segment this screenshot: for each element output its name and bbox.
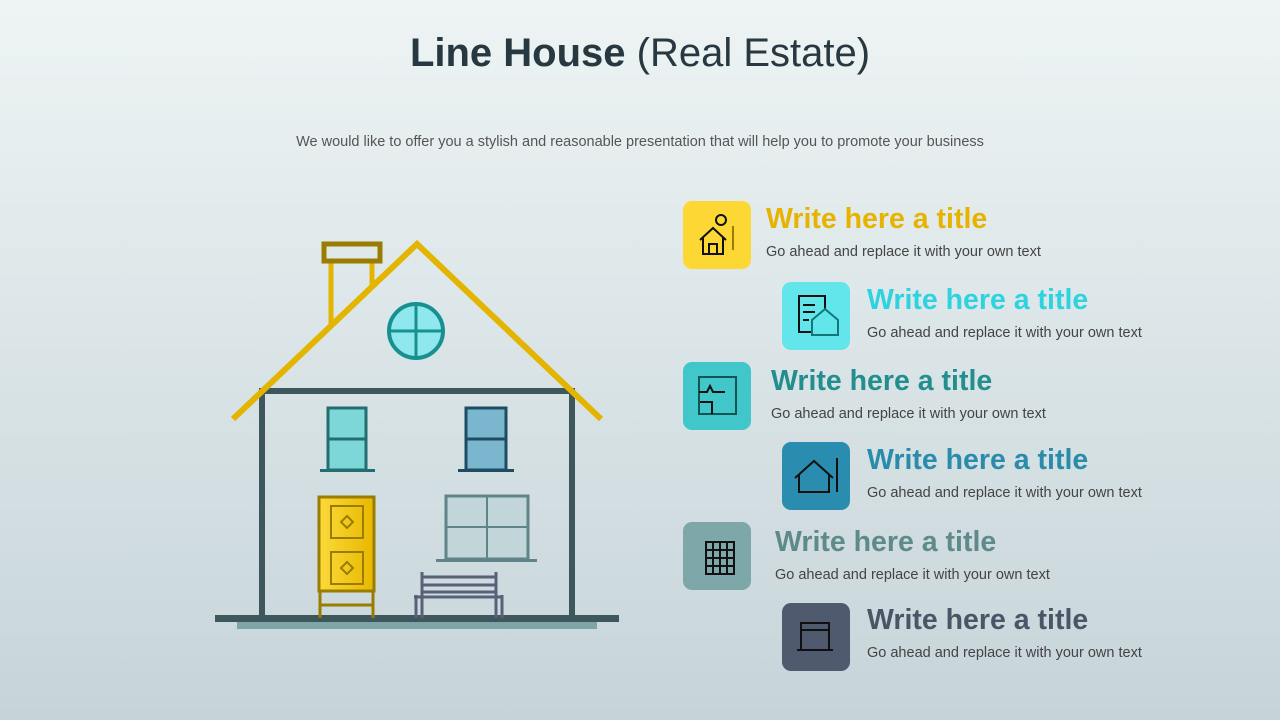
item 6 text — [867, 604, 1142, 661]
item 2 text: Go ahead and replace it with your own text — [867, 325, 1142, 341]
item 2 text: Write here a title — [867, 284, 1088, 316]
item 4 text — [867, 444, 1142, 501]
item 6 text: Write here a title — [867, 604, 1088, 636]
item 6 text: Go ahead and replace it with your own text — [867, 645, 1142, 661]
item 1 text: Write here a title — [766, 203, 987, 235]
item 3 text: Go ahead and replace it with your own text — [771, 406, 1046, 422]
title: Line House (Real Estate) — [410, 31, 870, 75]
item 4 text: Write here a title — [867, 444, 1088, 476]
item 1 text: Go ahead and replace it with your own text — [766, 244, 1041, 260]
item 2 text — [867, 284, 1142, 341]
item 3 text — [771, 365, 1046, 422]
item 1 icon — [683, 201, 751, 269]
item 6 icon — [782, 603, 850, 671]
item 3 icon — [683, 362, 751, 430]
item 5 text: Write here a title — [775, 526, 996, 558]
item 2 icon — [782, 282, 850, 350]
item 3 text: Write here a title — [771, 365, 992, 397]
item 5 text: Go ahead and replace it with your own text — [775, 567, 1050, 583]
item 4 icon — [782, 442, 850, 510]
item 5 icon — [683, 522, 751, 590]
item 1 text — [766, 203, 1041, 260]
item 4 text: Go ahead and replace it with your own text — [867, 485, 1142, 501]
subtitle: We would like to offer you a stylish and reasonable presentation that will help you to promote your business — [296, 134, 984, 150]
item 5 text — [775, 526, 1050, 583]
